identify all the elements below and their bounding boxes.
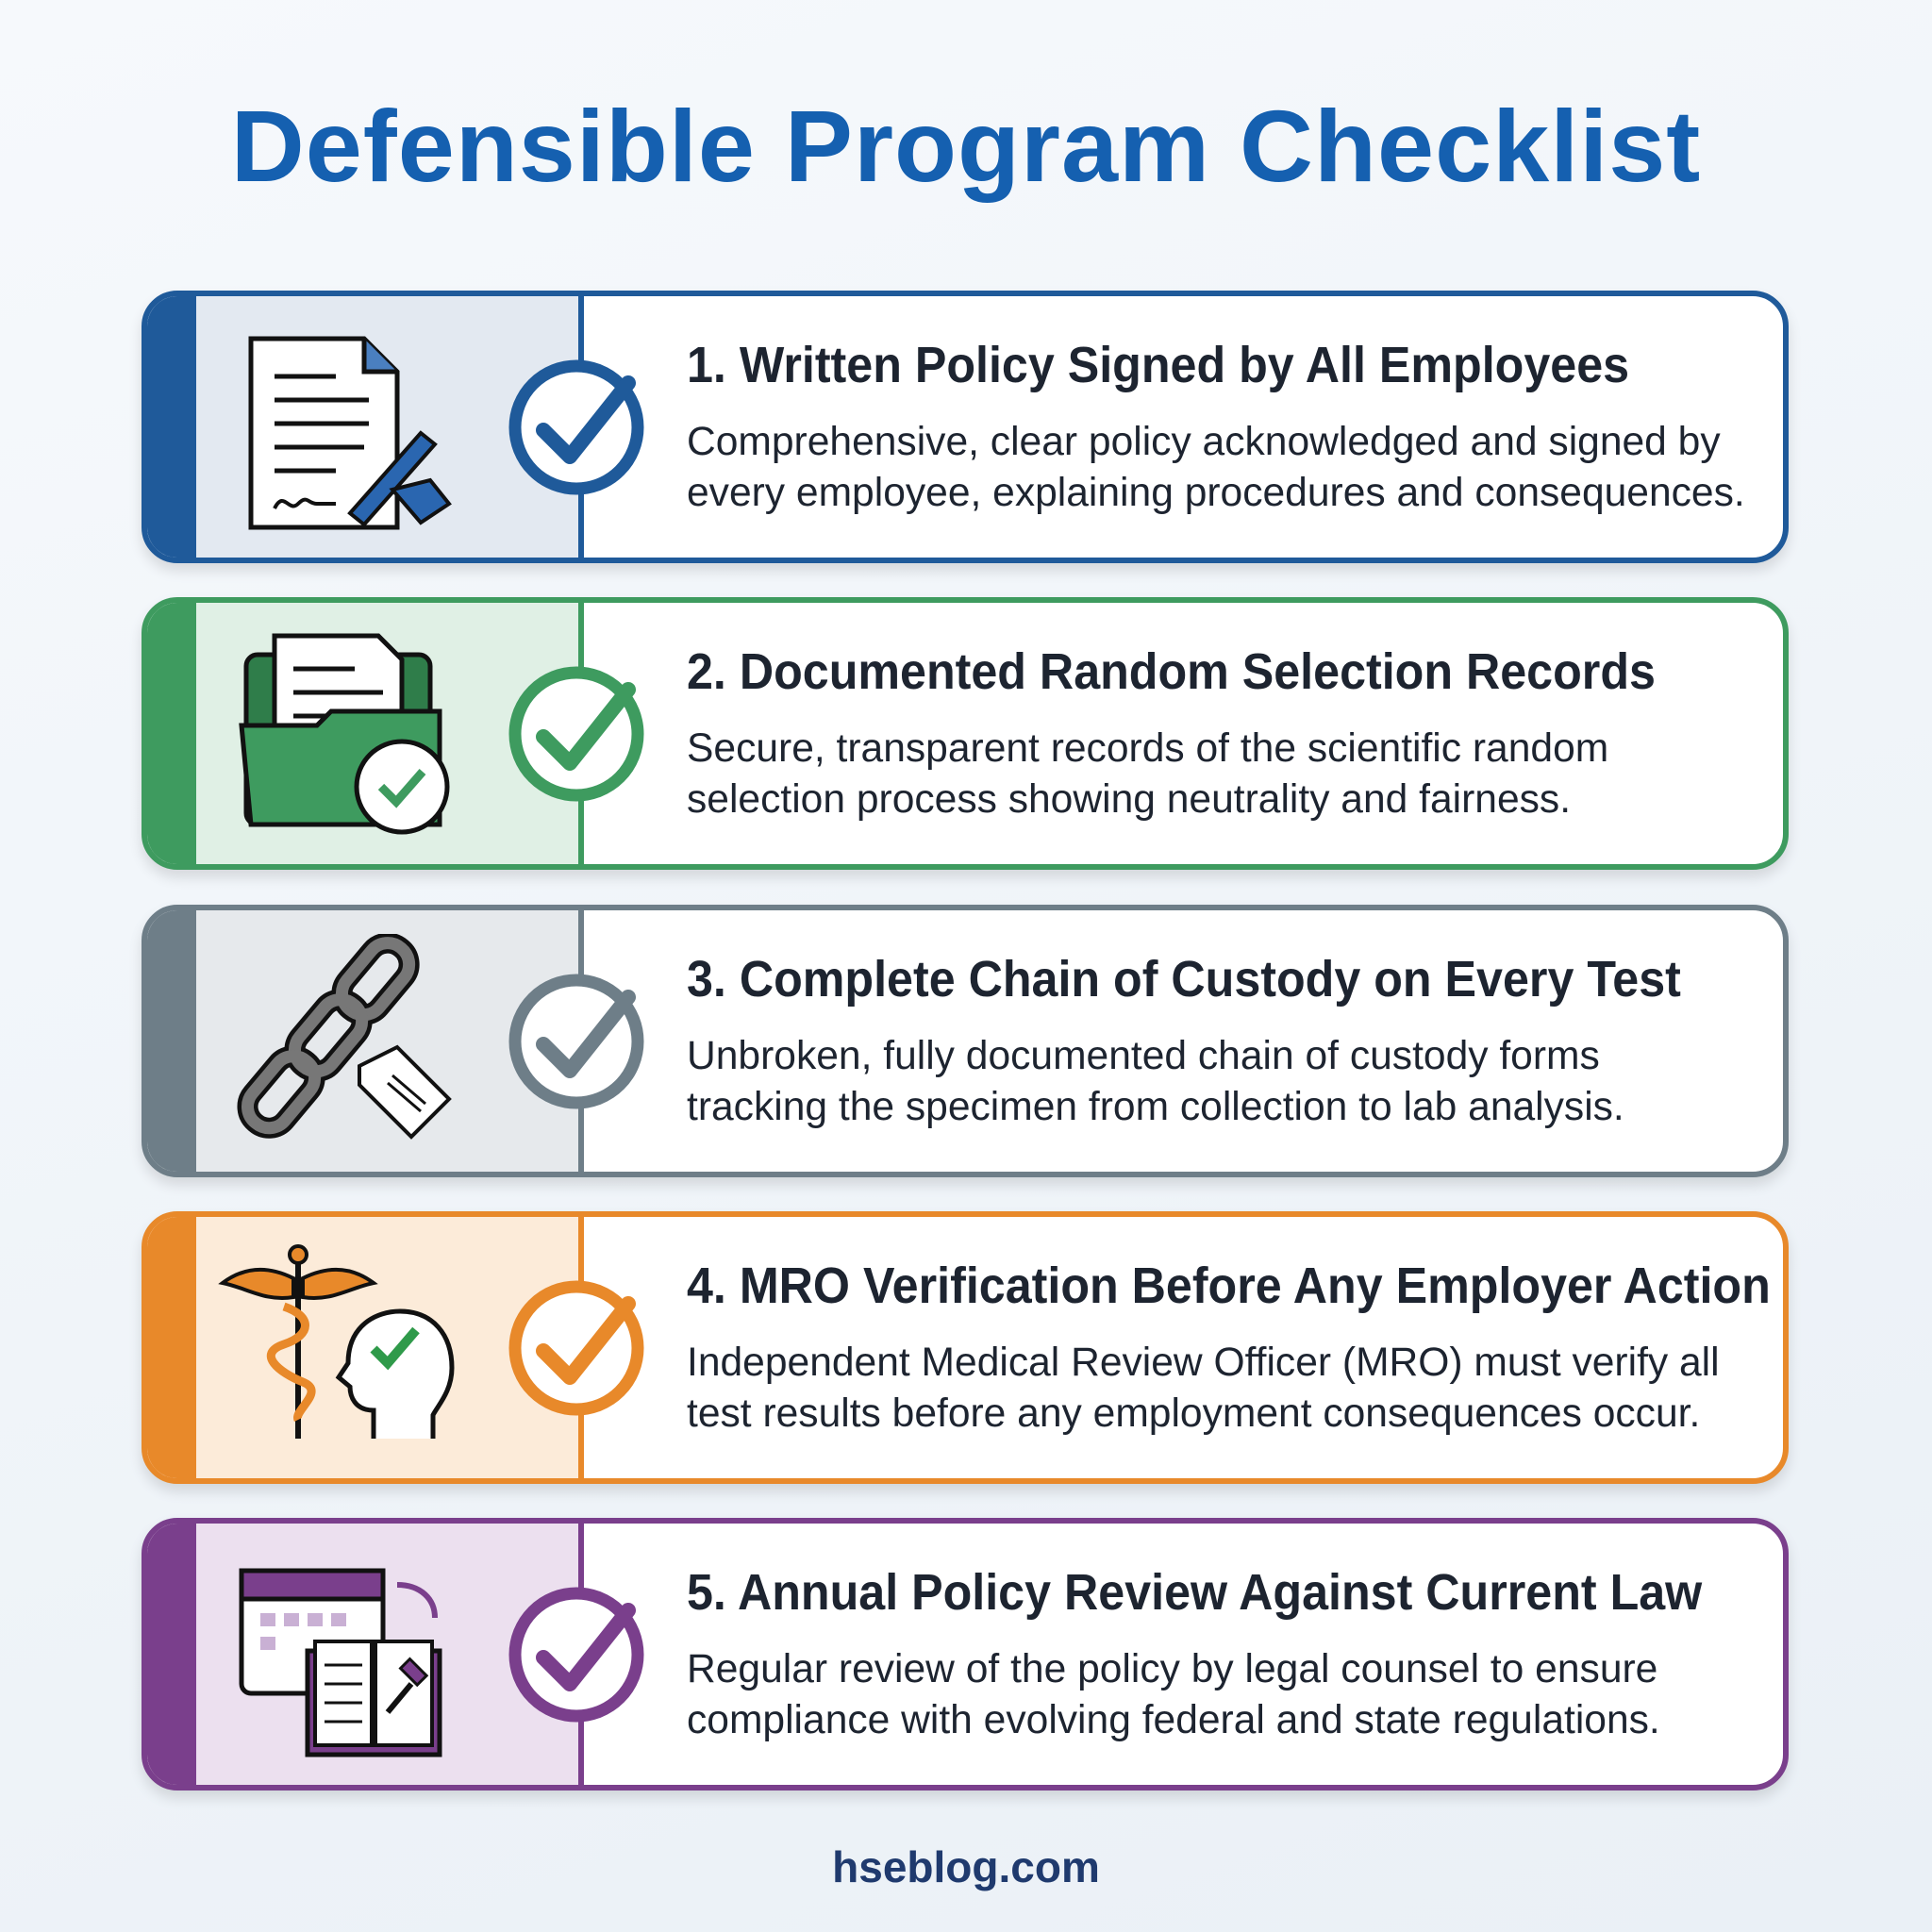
- footer: hseblog.com: [832, 1842, 1100, 1891]
- text: Independent Medical Review Officer (MRO) must verify all: [687, 1340, 1720, 1385]
- icon: signed document: [249, 336, 452, 530]
- text: Secure, transparent records of the scientific random: [687, 725, 1608, 771]
- heading: 2. Documented Random Selection Records: [687, 643, 1656, 700]
- text: Unbroken, fully documented chain of custody forms: [687, 1033, 1600, 1078]
- text: [687, 1033, 1624, 1129]
- text: Comprehensive, clear policy acknowledged and signed by: [687, 419, 1721, 464]
- panel: item 3: [142, 905, 1789, 1177]
- icon: calendar and law book: [240, 1568, 441, 1757]
- title: Defensible Program Checklist: [231, 89, 1701, 203]
- panel: item 4: [142, 1211, 1789, 1484]
- text: Regular review of the policy by legal counsel to ensure: [687, 1646, 1657, 1691]
- panel: item 1: [142, 291, 1789, 563]
- heading: 1. Written Policy Signed by All Employees: [687, 337, 1629, 393]
- icon: check: [509, 1587, 643, 1723]
- icon: check: [509, 1281, 643, 1415]
- text: [687, 419, 1745, 515]
- panel: item 5: [142, 1518, 1789, 1790]
- icon: check: [509, 666, 643, 802]
- icon: folder with check: [239, 634, 449, 834]
- text: [687, 1340, 1720, 1436]
- text: test results before any employment consequences occur.: [687, 1391, 1700, 1436]
- icon: check: [509, 360, 643, 494]
- text: selection process showing neutrality and fairness.: [687, 776, 1571, 822]
- icon: caduceus and head: [218, 1244, 455, 1439]
- icon: check: [509, 974, 643, 1109]
- text: [687, 725, 1608, 822]
- heading: 3. Complete Chain of Custody on Every Test: [687, 951, 1681, 1008]
- panel: item 2: [142, 597, 1789, 870]
- heading: 4. MRO Verification Before Any Employer Action: [687, 1257, 1771, 1314]
- text: every employee, explaining procedures and consequences.: [687, 470, 1745, 515]
- heading: 5. Annual Policy Review Against Current Law: [687, 1564, 1702, 1621]
- text: tracking the specimen from collection to lab analysis.: [687, 1084, 1624, 1129]
- text: compliance with evolving federal and state regulations.: [687, 1697, 1660, 1742]
- text: [687, 1646, 1660, 1742]
- icon: chain with tag: [238, 934, 452, 1140]
